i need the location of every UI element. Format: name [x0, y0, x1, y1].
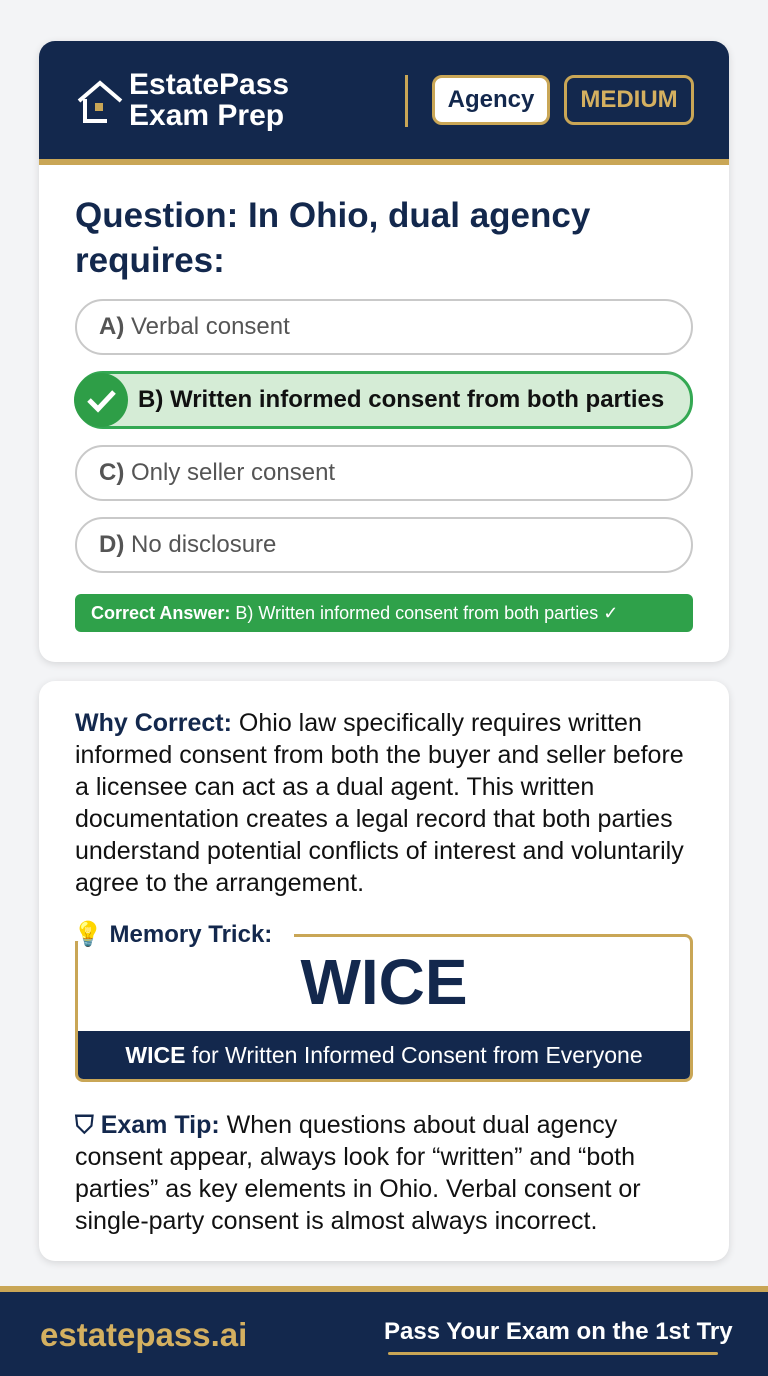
- option D: D) No disclosure: [99, 531, 276, 558]
- explanation card: [39, 681, 729, 1261]
- icon: check: [74, 373, 128, 427]
- logo text: [129, 68, 289, 132]
- question: Question: In Ohio, dual agency requires:: [75, 196, 590, 280]
- footer: Pass Your Exam on the 1st Try: [384, 1318, 733, 1345]
- correct answer bar: [75, 594, 693, 632]
- option C: [75, 445, 693, 501]
- tag: MEDIUM: [564, 75, 694, 125]
- correct answer bar: Correct Answer: B) Written informed consent from both parties ✓: [91, 603, 618, 623]
- option A: A) Verbal consent: [99, 313, 290, 340]
- header bar: [39, 41, 729, 165]
- top card: [39, 41, 729, 662]
- why correct: Why Correct: Ohio law specifically requires written informed consent from both the buyer and seller before a licensee can act as a dual agent. This written documentation creates a legal record that both parties understand potential conflicts of interest and voluntarily agree to the arrangement.: [75, 709, 684, 897]
- memory box: [75, 934, 693, 1082]
- tag: MEDIUM: MEDIUM: [580, 86, 678, 113]
- logo text: EstatePass: [129, 68, 289, 101]
- icon: house: [78, 80, 122, 123]
- memory box: WICE: [300, 946, 468, 1018]
- footer: [0, 1286, 768, 1376]
- option B correct: B) Written informed consent from both parties: [138, 386, 664, 413]
- option C: C) Only seller consent: [99, 459, 335, 486]
- tag: Agency: [432, 75, 550, 125]
- memory box: WICE for Written Informed Consent from Everyone: [125, 1042, 643, 1068]
- memory trick heading: 💡 Memory Trick:: [73, 921, 272, 948]
- tag: Agency: Agency: [448, 86, 534, 113]
- exam tip: ⛉ Exam Tip: When questions about dual agency consent appear, always look for “written” and “both parties” as key elements in Ohio. Verbal consent or single-party consent is almost always incorrect.: [75, 1111, 641, 1235]
- footer: estatepass.ai: [40, 1316, 247, 1353]
- option D: [75, 517, 693, 573]
- logo text: Exam Prep: [129, 99, 284, 132]
- option B correct: [75, 371, 693, 429]
- option A: [75, 299, 693, 355]
